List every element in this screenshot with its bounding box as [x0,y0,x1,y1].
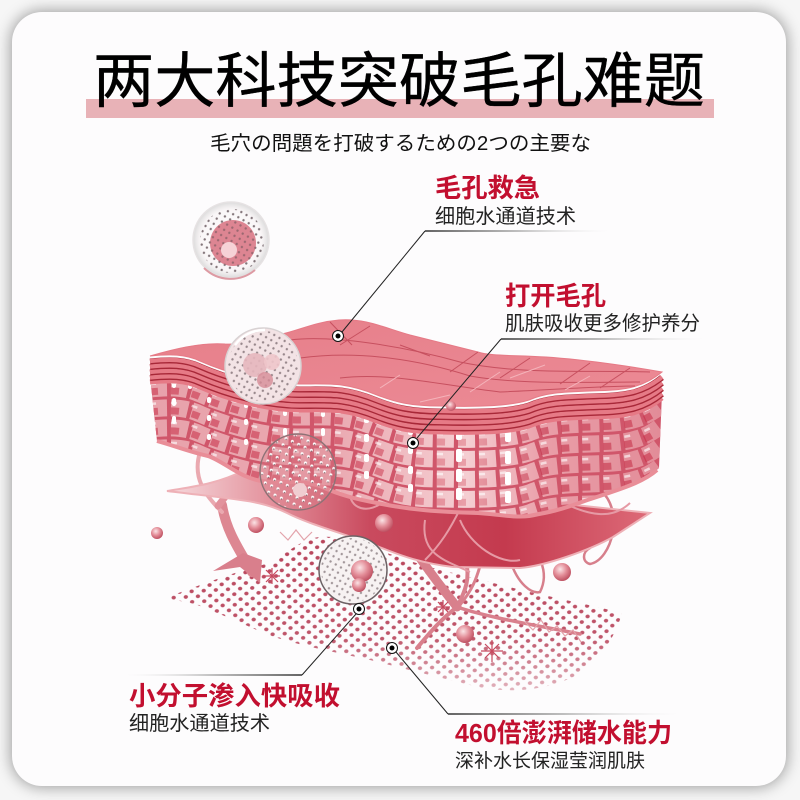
callout: 打开毛孔: 打开毛孔 [505,281,606,311]
bubble: fourth over dots [319,536,387,604]
title: 两大科技突破毛孔难题 [93,48,705,115]
small floating spheres [151,401,571,643]
title underline band [86,99,714,118]
bubble: third on cell wall [260,434,336,510]
callout: 小分子渗入快吸收: 小分子渗入快吸收 [129,681,340,711]
callout: 打开毛孔 [408,281,705,448]
epidermis layered stack [150,360,662,432]
lower dermis sheet [167,470,650,568]
callout: 毛孔救急: 毛孔救急 [435,173,540,203]
bubble: second on stack [225,328,301,404]
dendrites and fibres [198,452,614,648]
dot-matrix base layer [165,537,622,690]
epidermis top surface [150,320,662,406]
callout: 460倍澎湃储水能力: 460倍澎湃储水能力 [455,718,672,748]
callout: 打开毛孔: 肌肤吸收更多修护养分 [505,312,700,335]
bubble: pore capsule top [193,202,269,279]
white cell highlights [172,380,511,503]
subtitle: 毛穴の問題を打破するための2つの主要な [210,132,591,155]
cell block bottom lip [157,441,657,517]
callout: 毛孔救急 [332,173,610,342]
fibres over sheet [350,490,630,572]
callout: 460倍澎湃储水能力 [386,642,680,772]
micro stars and DNA details [264,530,581,662]
callout: 小分子渗入快吸收 [125,604,364,735]
callout: 小分子渗入快吸收: 细胞水通道技术 [129,712,270,735]
callout: 毛孔救急: 细胞水通道技术 [435,205,576,228]
cell block layer [150,383,662,514]
callout: 460倍澎湃储水能力: 深补水长保湿莹润肌肤 [455,750,645,772]
